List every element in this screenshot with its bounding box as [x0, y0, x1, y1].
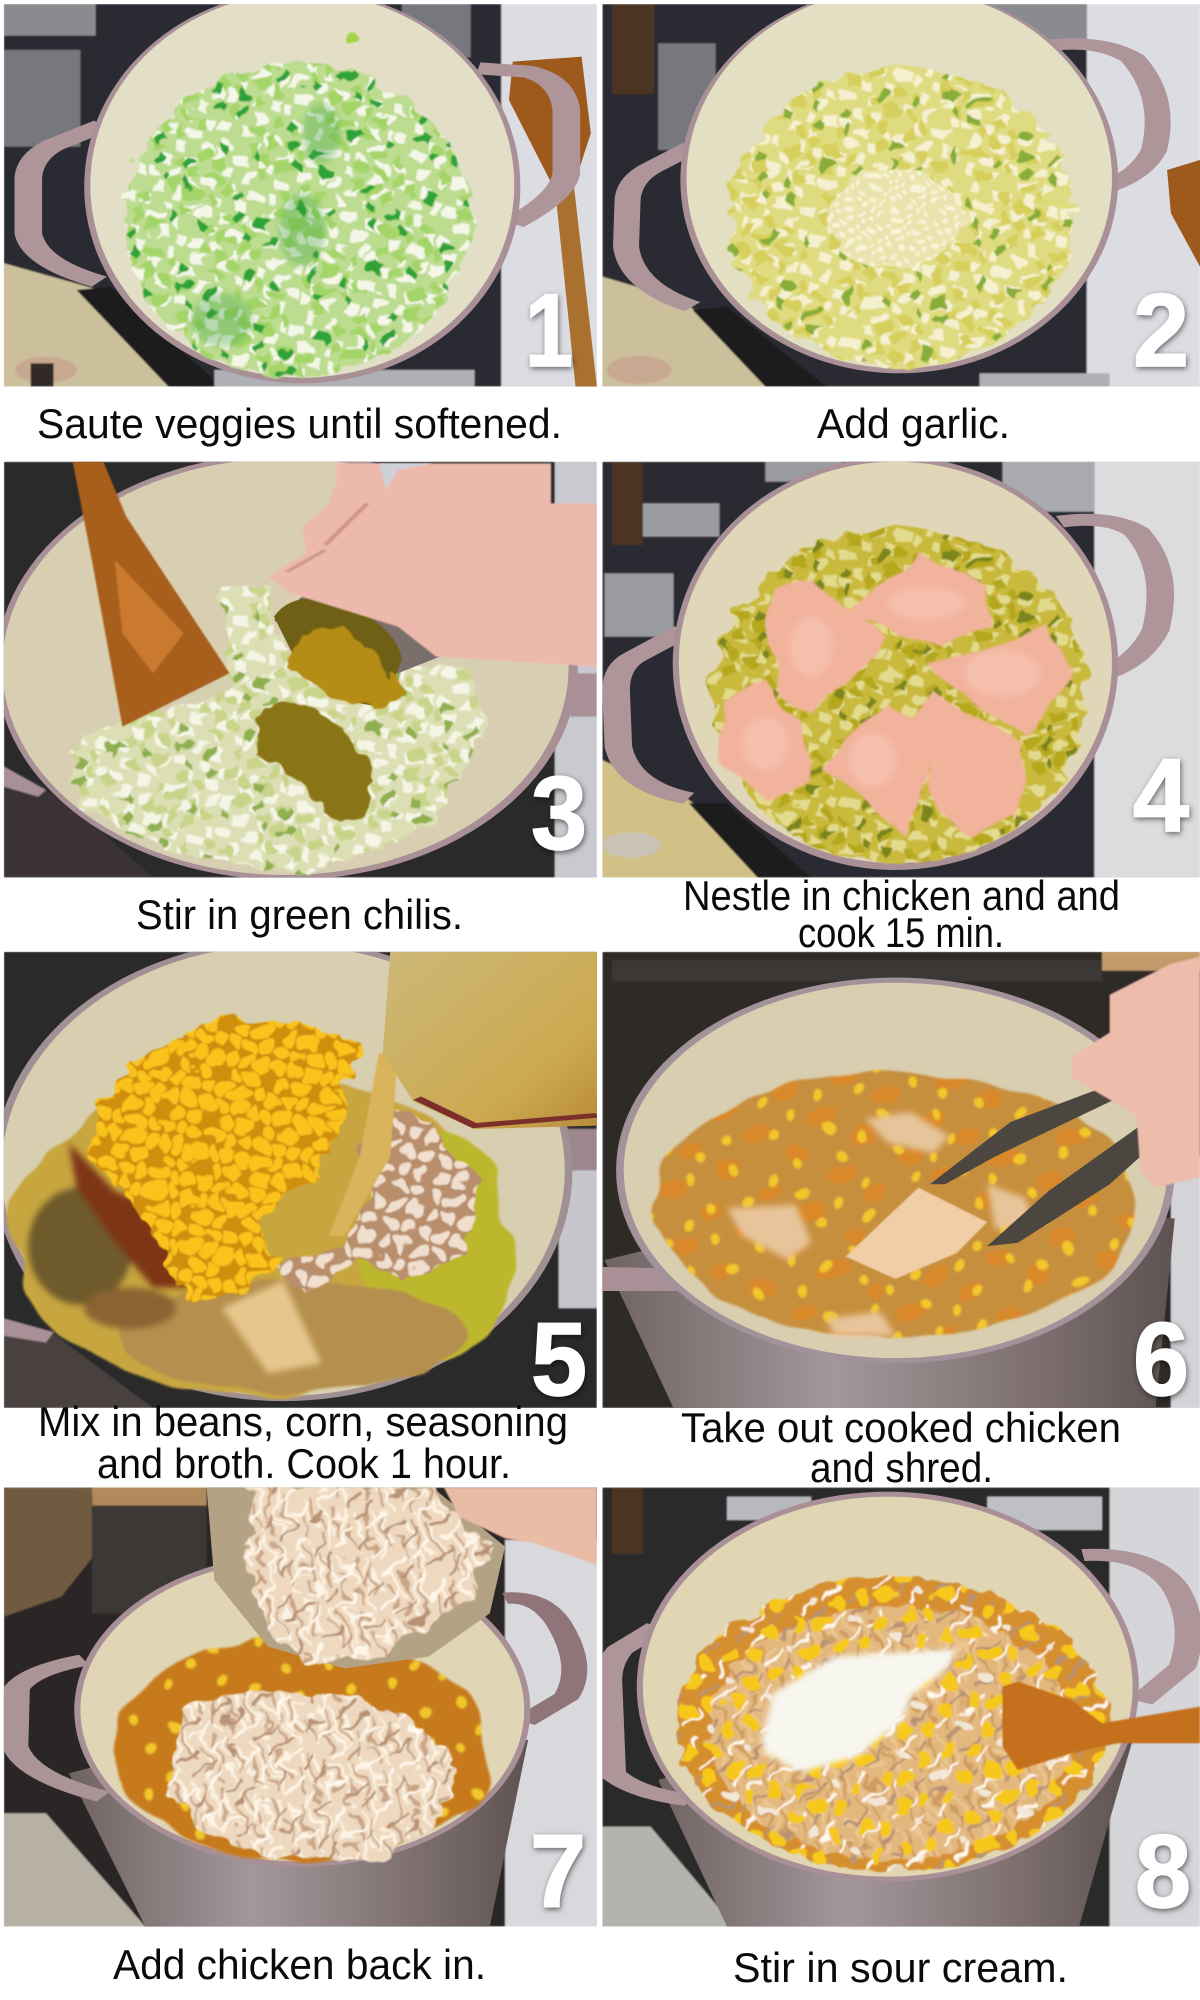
wooden spoon edge: [1167, 160, 1200, 267]
chilis in cup: [287, 627, 402, 708]
pot handles: [28, 68, 566, 282]
caption 7: Add chicken back in.: [113, 1941, 486, 1988]
pale veggies: [69, 587, 490, 875]
seasoning piles: [28, 1143, 222, 1329]
background: [602, 1487, 1200, 1927]
pot handles: [608, 1555, 1189, 1800]
caption 8: Stir in sour cream.: [733, 1944, 1068, 1991]
hand: [268, 463, 597, 667]
number 4: 4: [1133, 738, 1189, 854]
diced celery and onion: [125, 29, 469, 377]
number 6: 6: [1133, 1302, 1189, 1418]
caption 1: Saute veggies until softened.: [37, 400, 562, 447]
chili stew: [677, 1577, 1106, 1870]
background: [4, 462, 597, 878]
wooden spoon: [1003, 1682, 1200, 1770]
soup with corn: [654, 1072, 1136, 1337]
caption 5: Mix in beans, corn, seasoning: [38, 1398, 568, 1445]
chicken piece: [222, 1281, 321, 1374]
shredded chicken in pot: [168, 1690, 459, 1860]
raw chicken breasts: [723, 550, 1075, 837]
corn kernels: [92, 1015, 360, 1301]
number 8: 8: [1135, 1814, 1191, 1930]
pot body: [602, 1191, 1175, 1408]
tongs: [930, 1088, 1156, 1246]
pot handles: [616, 520, 1160, 798]
number 3: 3: [531, 756, 587, 872]
pot rim and cream interior: [680, 0, 1118, 373]
caption 6: [681, 1404, 1121, 1491]
wooden spoon: [509, 57, 597, 387]
softened veggies: [729, 66, 1074, 367]
panel: step 6 take out chicken photo: [602, 952, 1200, 1408]
broth: [11, 1077, 513, 1394]
pot rim and interior: [616, 978, 1175, 1363]
shredded chicken in bowl: [245, 1487, 490, 1665]
number 2: 2: [1133, 273, 1189, 389]
wooden spoon: [73, 462, 230, 727]
pot rim and interior: [0, 940, 572, 1401]
panel: step 2 add garlic photo: [602, 0, 1200, 387]
caption 4: cook 15 min.: [798, 909, 1004, 956]
lifted chicken: [846, 1188, 987, 1279]
pot body: [658, 1713, 1133, 1927]
stove background: [4, 4, 597, 387]
pot rim and cream interior: [84, 0, 520, 383]
bowl: [207, 1487, 505, 1668]
caption 5: [38, 1398, 568, 1487]
panel: step 7 add chicken back photo: [4, 1487, 597, 1927]
pot rim and interior: [74, 1553, 530, 1867]
caption 6: and shred.: [810, 1444, 993, 1491]
minced garlic pile: [828, 169, 963, 268]
stove background: [602, 4, 1200, 387]
hand: [1071, 957, 1200, 1188]
ring: [379, 463, 432, 490]
pot handles: [15, 1598, 574, 1797]
hand: [444, 1487, 597, 1565]
white beans: [268, 1108, 474, 1294]
chicken pieces: [727, 1112, 1033, 1336]
number 1: 1: [525, 273, 573, 389]
darker green pieces: [191, 103, 341, 347]
number 7: 7: [530, 1814, 586, 1930]
pot rim and interior: [637, 1492, 1139, 1882]
measuring cup: [274, 593, 440, 707]
panel: step 4 nestle chicken photo: [602, 457, 1200, 878]
sour cream: [761, 1648, 957, 1772]
caption 2: Add garlic.: [817, 400, 1010, 447]
olive veggies: [712, 527, 1087, 863]
panel: step 8 sour cream photo: [602, 1487, 1200, 1927]
measuring cup: [383, 952, 597, 1129]
green chili pile: [253, 702, 375, 823]
stove background: [602, 462, 1200, 878]
panel: step 3 green chilis photo: [0, 453, 597, 880]
pot body: [69, 1713, 528, 1927]
panel: step 5 beans corn broth photo: [0, 940, 597, 1408]
chicken highlights: [742, 587, 1041, 787]
orange soup: [112, 1635, 492, 1862]
caption 4: [683, 872, 1120, 956]
caption 6: Take out cooked chicken: [681, 1404, 1121, 1451]
caption 5: and broth. Cook 1 hour.: [97, 1440, 511, 1487]
broth stream: [329, 1053, 398, 1236]
pot rim and interior: [673, 457, 1118, 870]
caption 4: Nestle in chicken and and: [683, 872, 1120, 919]
caption 3: Stir in green chilis.: [136, 891, 463, 938]
background: [602, 952, 1200, 1408]
panel: step 1 saute veggies photo: [4, 0, 597, 387]
number 5: 5: [531, 1302, 587, 1418]
background: [4, 952, 597, 1408]
pot handles: [626, 44, 1158, 307]
pot rim and interior: [0, 453, 578, 880]
background: [4, 1487, 597, 1927]
